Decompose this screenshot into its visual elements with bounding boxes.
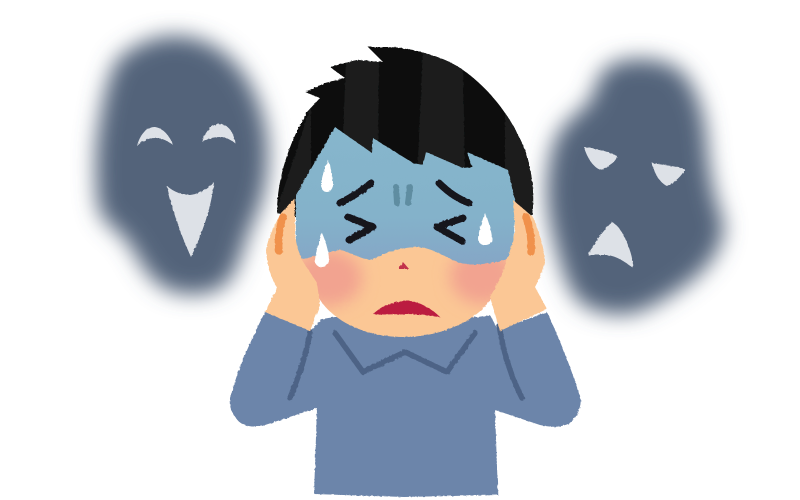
right ear — [526, 217, 531, 252]
left ear — [279, 217, 283, 251]
face — [294, 127, 516, 337]
mouth — [373, 301, 440, 317]
shadow face: left — [96, 36, 268, 294]
right cheek blush — [445, 258, 506, 310]
right shadow face features — [584, 147, 685, 268]
right shadow blob — [547, 59, 724, 314]
left shadow face features — [137, 124, 235, 257]
left cheek blush — [294, 250, 362, 306]
sweater — [230, 312, 581, 497]
right hand — [490, 200, 547, 331]
eyebrows — [340, 183, 469, 203]
left sleeve fold — [290, 332, 310, 398]
sweater collar — [335, 333, 475, 372]
skin — [296, 240, 512, 337]
man figure — [230, 45, 581, 497]
left hand — [265, 198, 320, 331]
right sleeve fold — [499, 325, 522, 398]
closed eyes — [348, 217, 463, 241]
shadow face: right — [547, 59, 724, 314]
blue gloom over upper face — [296, 127, 516, 265]
left shadow blob — [96, 36, 268, 294]
frown lines — [396, 187, 410, 203]
nose — [398, 262, 409, 269]
hair — [277, 46, 534, 218]
sweat drops — [315, 160, 492, 267]
illustration: anxious man covering ears between two shadow faces — [79, 20, 740, 498]
